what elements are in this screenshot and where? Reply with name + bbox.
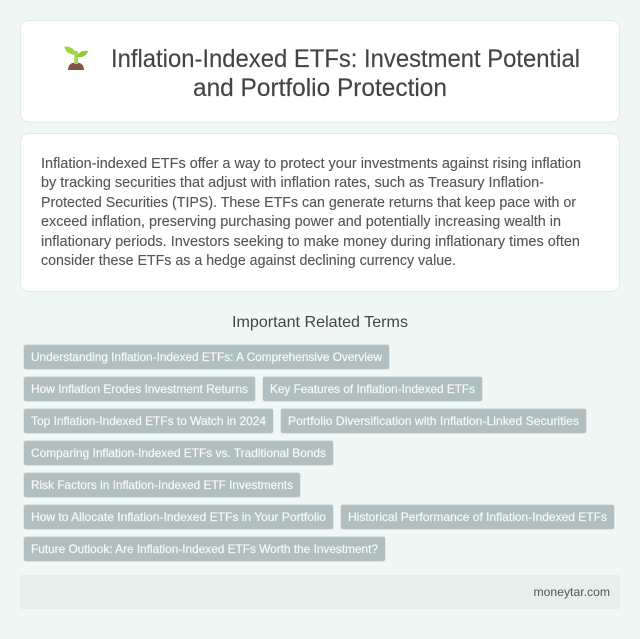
text block: description: by tracking securities that adjust with inflation rates, such as Treasury Inflation- [41, 174, 544, 191]
text block: description: inflationary periods. Investors seeking to make money during inflationary times often [41, 233, 580, 250]
tag: understanding: Understanding Inflation-Indexed ETFs: A Comprehensive Overview [31, 350, 382, 364]
panel: title card [20, 20, 620, 122]
text block: description: Protected Securities (TIPS). These ETFs can generate returns that keep pace with or [41, 194, 576, 211]
tag: historical: Historical Performance of Inflation-Indexed ETFs [348, 510, 607, 524]
icon: sprout [64, 46, 88, 70]
footer [20, 575, 620, 609]
tag: comparing: Comparing Inflation-Indexed ETFs vs. Traditional Bonds [31, 446, 326, 460]
tag: understanding [24, 344, 390, 370]
text block: description: Inflation-indexed ETFs offer a way to protect your investments against rising inflation [41, 155, 581, 172]
tag: future outlook [24, 536, 386, 562]
tag: top ETFs [24, 408, 274, 434]
tag: key features: Key Features of Inflation-Indexed ETFs [270, 382, 475, 396]
tag: future outlook: Future Outlook: Are Inflation-Indexed ETFs Worth the Investment? [31, 542, 378, 556]
panel: description card [20, 134, 620, 292]
tag: top ETFs: Top Inflation-Indexed ETFs to Watch in 2024 [31, 414, 266, 428]
heading: related terms: Important Related Terms [232, 314, 408, 331]
tag: allocate: How to Allocate Inflation-Indexed ETFs in Your Portfolio [31, 510, 326, 524]
tag: risk factors [24, 472, 300, 498]
tag: comparing [24, 440, 334, 466]
tag: diversification: Portfolio Diversification with Inflation-Linked Securities [288, 414, 579, 428]
title [111, 45, 580, 102]
text block: description: exceed inflation, preserving purchasing power and potentially increasing wealth in [41, 213, 561, 230]
tag: allocate [24, 504, 334, 530]
tag: erodes: How Inflation Erodes Investment Returns [31, 382, 248, 396]
text block: description: consider these ETFs as a hedge against declining currency value. [41, 252, 456, 269]
tag list [24, 344, 614, 562]
tag: erodes [24, 376, 256, 402]
tag: diversification [280, 408, 586, 434]
tag: risk factors: Risk Factors in Inflation-Indexed ETF Investments [31, 478, 293, 492]
tag: key features [262, 376, 482, 402]
tag: historical [340, 504, 614, 530]
footer: moneytar.com [534, 585, 610, 599]
text block: description [41, 155, 581, 269]
title: and Portfolio Protection [193, 74, 447, 102]
title: Inflation-Indexed ETFs: Investment Potential [111, 45, 580, 73]
